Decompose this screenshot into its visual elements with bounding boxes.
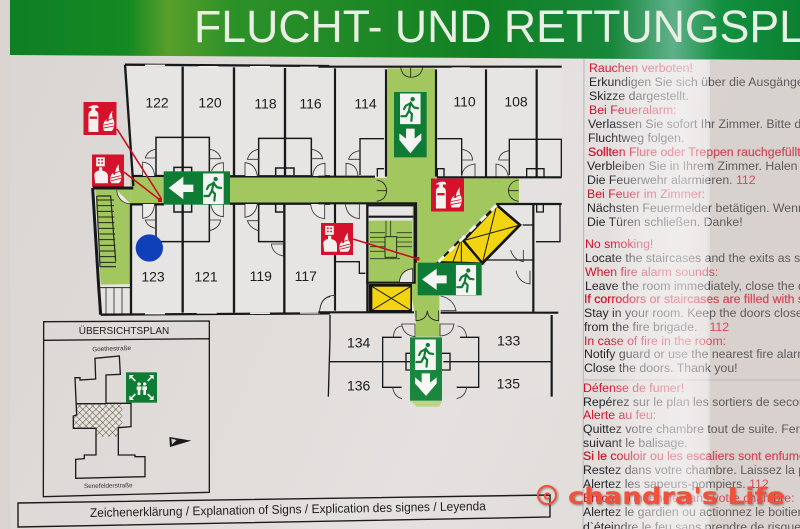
- exit sign: south: [410, 337, 442, 401]
- text block: French: Défense de fumer!: [583, 381, 684, 395]
- text block: French: [583, 381, 800, 529]
- text block: English: [584, 237, 800, 375]
- exit sign: north corridor: [394, 92, 427, 157]
- icon: fire extinguisher sign east: [431, 178, 464, 212]
- room numbers: west wing: 116: [299, 96, 322, 112]
- room numbers: west wing: 120: [198, 95, 222, 111]
- text block: German: Die Feuerwehr alarmieren. 112: [587, 173, 756, 187]
- corridor: central and east: [330, 68, 519, 337]
- light glare over instructions: [608, 60, 710, 529]
- west wing floor plan: [93, 65, 344, 315]
- text block: German: Skizze dargestellt.: [589, 89, 689, 103]
- text block: English: No smoking!: [585, 237, 653, 251]
- legend header: [18, 495, 550, 527]
- text block: German: Rauchen verboten!: [589, 61, 693, 75]
- street label: north: Goethestraße: [92, 345, 132, 353]
- room numbers: central and east: 133: [497, 332, 521, 348]
- room numbers: west wing: 121: [194, 269, 218, 285]
- room numbers: central and east: 134: [347, 334, 371, 350]
- text block: English: from the fire brigade. 112: [584, 320, 729, 334]
- title banner: [10, 0, 800, 60]
- text block: French: suivant le balisage.: [583, 436, 688, 450]
- panel: overview plan: [43, 321, 209, 497]
- icon: assembly marker blue dot: [136, 234, 163, 262]
- text block: German: Die Türen schließen. Danke!: [587, 215, 743, 229]
- room numbers: central and east: 108: [504, 94, 528, 110]
- watermark: chandra's Life: [568, 484, 785, 510]
- watermark: c: [544, 488, 551, 502]
- room numbers: central and east: 136: [347, 378, 371, 394]
- room numbers: west wing: 117: [295, 268, 317, 284]
- icon: north arrow: [169, 437, 191, 447]
- room numbers: west wing: 118: [254, 96, 277, 112]
- street label: south: Senefelderstraße: [84, 482, 133, 490]
- icon: fire extinguisher sign west: [84, 102, 161, 198]
- icon: fire alarm sign west: [92, 154, 162, 202]
- room numbers: central and east: 114: [354, 96, 377, 112]
- text block: English: In case of fire in the room:: [584, 334, 726, 348]
- exit sign: central: [418, 263, 482, 295]
- text block: French: En cas d'incendie dans votre chambre:: [583, 491, 795, 505]
- panel: instructions: [583, 58, 800, 529]
- icon: fire alarm sign central: [321, 223, 420, 260]
- exit sign: west corridor: [164, 171, 230, 205]
- icon: assembly point sign: [126, 372, 157, 403]
- room numbers: west wing: 119: [250, 268, 272, 284]
- legend header: Zeichenerklärung / Explanation of Signs / Explication des signes / Leyenda: [90, 499, 486, 520]
- heading: overview plan: ÜBERSICHTSPLAN: [79, 325, 169, 337]
- stairwell: west: [95, 189, 131, 314]
- room numbers: west wing: [141, 94, 322, 285]
- text block: English: When fire alarm sounds:: [585, 265, 718, 279]
- corridor: west: [131, 177, 344, 203]
- text block: German: Bei Feuer im Zimmer:: [587, 187, 705, 201]
- building outline: [73, 356, 145, 478]
- room numbers: central and east: 135: [497, 376, 520, 392]
- text block: German: Bei Feueralarm:: [589, 103, 676, 117]
- room numbers: west wing: 122: [145, 94, 169, 110]
- stairwell: central: [367, 205, 415, 283]
- text block: German: [587, 61, 800, 229]
- text block: French: Alertez les sapeurs-pompiers. 112: [583, 477, 769, 491]
- central and east wing floor plan: [318, 67, 562, 407]
- south wing rooms: [328, 315, 552, 397]
- panel: floor plan: [84, 65, 562, 407]
- room numbers: central and east: 110: [453, 93, 476, 109]
- room numbers: central and east: [347, 93, 528, 394]
- room numbers: west wing: 123: [141, 269, 165, 285]
- yellow shaft: diagonal: [438, 205, 520, 263]
- text block: English: Close the doors. Thank you!: [584, 361, 738, 375]
- left board edge: [0, 0, 10, 529]
- text block: German: Fluchtweg folgen.: [588, 131, 684, 145]
- text block: French: Alerte au feu:: [583, 408, 656, 422]
- darker paper on the right: [710, 60, 800, 529]
- yellow shaft: lift room: [369, 284, 412, 312]
